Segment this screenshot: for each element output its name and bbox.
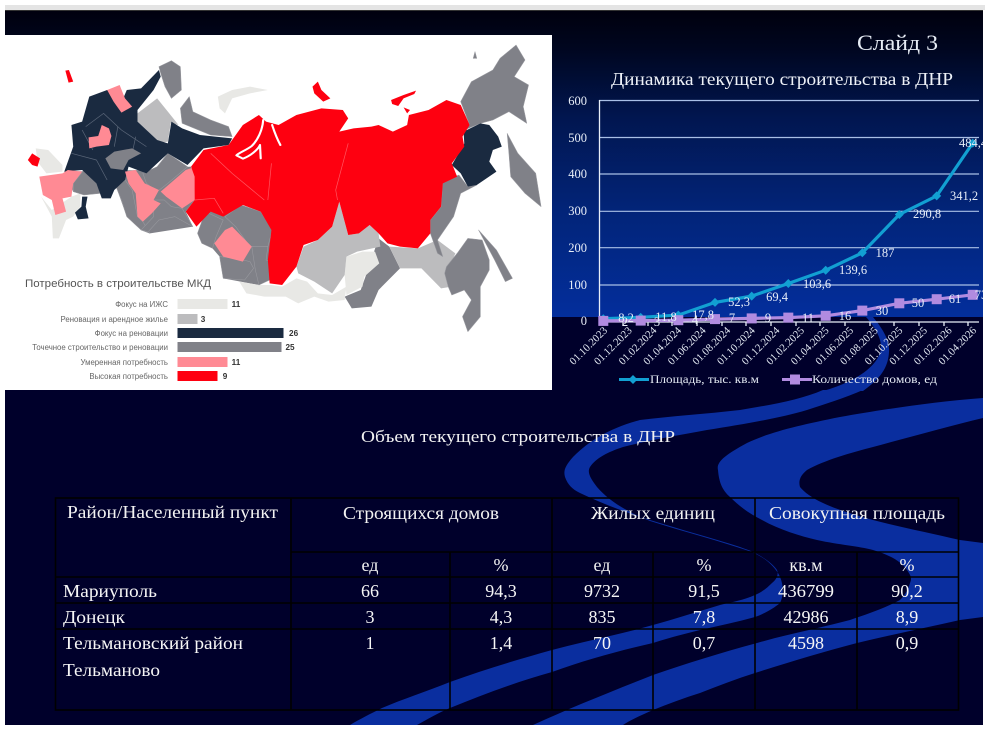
table header row: [67, 502, 945, 523]
row: Telmanovo district: Тельмановский район: [63, 633, 243, 653]
legend row: moderate need: Умеренная потребность: [80, 358, 168, 367]
row: Mariupol: 91,5: [688, 581, 720, 601]
data labels: houses: 73: [975, 288, 987, 302]
row: Donetsk: 3: [366, 607, 374, 627]
table header row: Совокупная площадь: [769, 503, 945, 523]
series: houses: [598, 290, 978, 326]
data labels: houses: 50: [912, 296, 924, 310]
legend row: spot construction: Точечное строительство и реновации: [32, 343, 168, 352]
chart legend: Площадь, тыс. кв.м: [650, 374, 760, 386]
table units row: ед: [594, 555, 610, 575]
axes: [599, 100, 979, 326]
data labels: area: 290,8: [913, 207, 941, 221]
row: Telmanovo district: 1: [366, 633, 374, 653]
table: [55, 498, 958, 710]
legend row: moderate need: 11: [232, 358, 241, 367]
data labels: area: 103,6: [803, 277, 831, 291]
chart heading: Динамика текущего строительства в ДНР: [611, 69, 953, 89]
y axis labels: 400: [568, 167, 587, 181]
row: Mariupol: 94,3: [485, 581, 517, 601]
table header row: Жилых единиц: [591, 503, 715, 523]
data labels: area: 484,4: [959, 136, 988, 150]
table header row: Строящихся домов: [343, 503, 499, 523]
x axis date labels: 01.04.2024: [641, 324, 684, 367]
legend row: individual housing: 11: [232, 300, 241, 309]
legend row: renovation and rental: [60, 314, 206, 324]
navy regions: renovation focus: [64, 70, 502, 219]
x axis date labels: 01.02.2026: [912, 324, 955, 367]
row: Donetsk: [63, 607, 918, 627]
x axis date labels: 01.08.2024: [690, 324, 734, 367]
y axis labels: 300: [568, 204, 587, 218]
x axis date labels: 01.08.2025: [838, 325, 881, 367]
table units row: %: [696, 555, 712, 575]
legend row: renovation and rental: 3: [201, 315, 206, 324]
data labels: area: 139,6: [839, 263, 867, 277]
data labels: area: 187: [876, 246, 894, 260]
data labels: area: 8,2: [618, 311, 634, 325]
legend row: individual housing: [115, 299, 241, 309]
table header row: Район/Населенный пункт: [67, 502, 278, 522]
x axis date labels: 01.10.2025: [862, 325, 905, 367]
row: Mariupol: 90,2: [891, 581, 923, 601]
data labels: area: 69,4: [766, 290, 789, 304]
legend row: renovation focus: 26: [289, 329, 299, 338]
row: Donetsk: 7,8: [693, 607, 715, 627]
chart legend: Количество домов, ед: [812, 374, 937, 386]
Ob gulf cut-out: [236, 120, 280, 159]
y axis labels: 0: [581, 314, 587, 328]
row: Donetsk: 835: [588, 607, 616, 627]
row: Mariupol: 436799: [778, 581, 834, 601]
grey regions: spot construction and renovation: [73, 45, 541, 332]
data labels: houses: 9: [765, 311, 771, 325]
map of Russia by construction need: [28, 45, 541, 332]
y axis labels: 500: [568, 131, 587, 145]
row: Telmanovo district: Тельманово: [63, 660, 160, 680]
y axis labels: 200: [568, 241, 587, 255]
gridlines: [599, 100, 979, 285]
data labels: area: 17,8: [692, 308, 714, 322]
table grid: [55, 498, 958, 710]
x axis date labels: [570, 326, 976, 364]
legend row: spot construction: 25: [285, 343, 295, 352]
map legend: [25, 278, 299, 381]
legend row: renovation and rental: Реновация и арендное жилье: [60, 315, 168, 324]
legend row: moderate need: [80, 357, 241, 367]
light grey regions: renovation and rental housing: [137, 98, 455, 293]
y axis labels: 600: [568, 94, 587, 108]
red regions: high need: [28, 70, 470, 285]
data labels: houses: 7: [729, 311, 735, 325]
x axis date labels: 01.02.2024: [616, 324, 660, 367]
decorative blue ribbons: [350, 317, 983, 725]
x axis date labels: 01.12.2025: [887, 325, 930, 367]
legend row: high need: Высокая потребность: [89, 372, 168, 381]
row: Telmanovo district: 70: [593, 633, 611, 653]
data labels: houses: [622, 290, 983, 326]
data labels: area: 341,2: [950, 189, 978, 203]
data labels: area: 52,3: [728, 295, 750, 309]
legend row: spot construction: [32, 342, 295, 352]
y axis labels: 100: [568, 278, 587, 292]
y axis labels: [568, 94, 587, 328]
series: area: [599, 139, 977, 323]
row: Mariupol: [63, 581, 923, 601]
grey underlay for contiguous regions: [64, 167, 400, 308]
legend row: high need: [89, 371, 228, 381]
table units row: кв.м: [789, 555, 823, 575]
x axis date labels: 01.10.2024: [715, 324, 758, 367]
x axis date labels: 01.06.2024: [666, 324, 709, 367]
row: Donetsk: Донецк: [63, 607, 125, 627]
x axis date labels: 01.04.2025: [789, 325, 832, 367]
data labels: area: [618, 136, 988, 325]
x axis date labels: 01.04.2026: [936, 324, 980, 367]
table heading: Объем текущего строительства в ДНР: [361, 427, 675, 446]
legend row: individual housing: Фокус на ИЖС: [115, 300, 168, 309]
row: Mariupol: Мариуполь: [63, 581, 157, 601]
x axis date labels: 01.12.2024: [739, 324, 783, 367]
row: Telmanovo district: [63, 633, 918, 680]
x axis date labels: 01.02.2025: [764, 325, 807, 367]
row: Mariupol: 9732: [584, 581, 620, 601]
legend title: Потребность в строительстве МКД: [25, 278, 212, 290]
data labels: houses: 16: [839, 309, 851, 323]
row: Telmanovo district: 0,7: [693, 633, 715, 653]
x axis date labels: 01.10.2023: [567, 325, 610, 367]
table units row: ед: [362, 555, 378, 575]
data labels: houses: 11: [802, 311, 814, 325]
legend row: high need: 9: [223, 372, 228, 381]
row: Mariupol: 66: [361, 581, 379, 601]
data labels: houses: 4: [692, 313, 699, 327]
row: Donetsk: 42986: [784, 607, 828, 627]
grey central region: [105, 148, 141, 170]
data labels: area: 11,8: [655, 310, 677, 324]
row: Telmanovo district: 0,9: [896, 633, 918, 653]
slide number: Слайд 3: [857, 30, 938, 55]
pink regions: moderate need: [39, 85, 252, 262]
row: Telmanovo district: 1,4: [490, 633, 512, 653]
map panel: [5, 35, 552, 390]
data labels: houses: 30: [876, 304, 888, 318]
data labels: houses: 61: [949, 292, 961, 306]
row: Telmanovo district: 4598: [788, 633, 824, 653]
row: Donetsk: 8,9: [896, 607, 918, 627]
lightest regions: individual housing focus: [36, 87, 379, 303]
legend row: renovation focus: [95, 328, 299, 338]
data labels: houses: 3: [654, 315, 660, 329]
row: Donetsk: 4,3: [490, 607, 512, 627]
table units row: %: [494, 555, 508, 575]
x axis date labels: 01.12.2023: [592, 325, 635, 367]
x axis date labels: 01.06.2025: [813, 325, 856, 367]
line chart: [567, 94, 988, 386]
chart legend: [619, 374, 937, 386]
legend row: renovation focus: Фокус на реновации: [95, 329, 168, 338]
table units row: %: [900, 555, 914, 575]
data labels: houses: 2: [622, 315, 628, 329]
table units row: [362, 555, 914, 575]
